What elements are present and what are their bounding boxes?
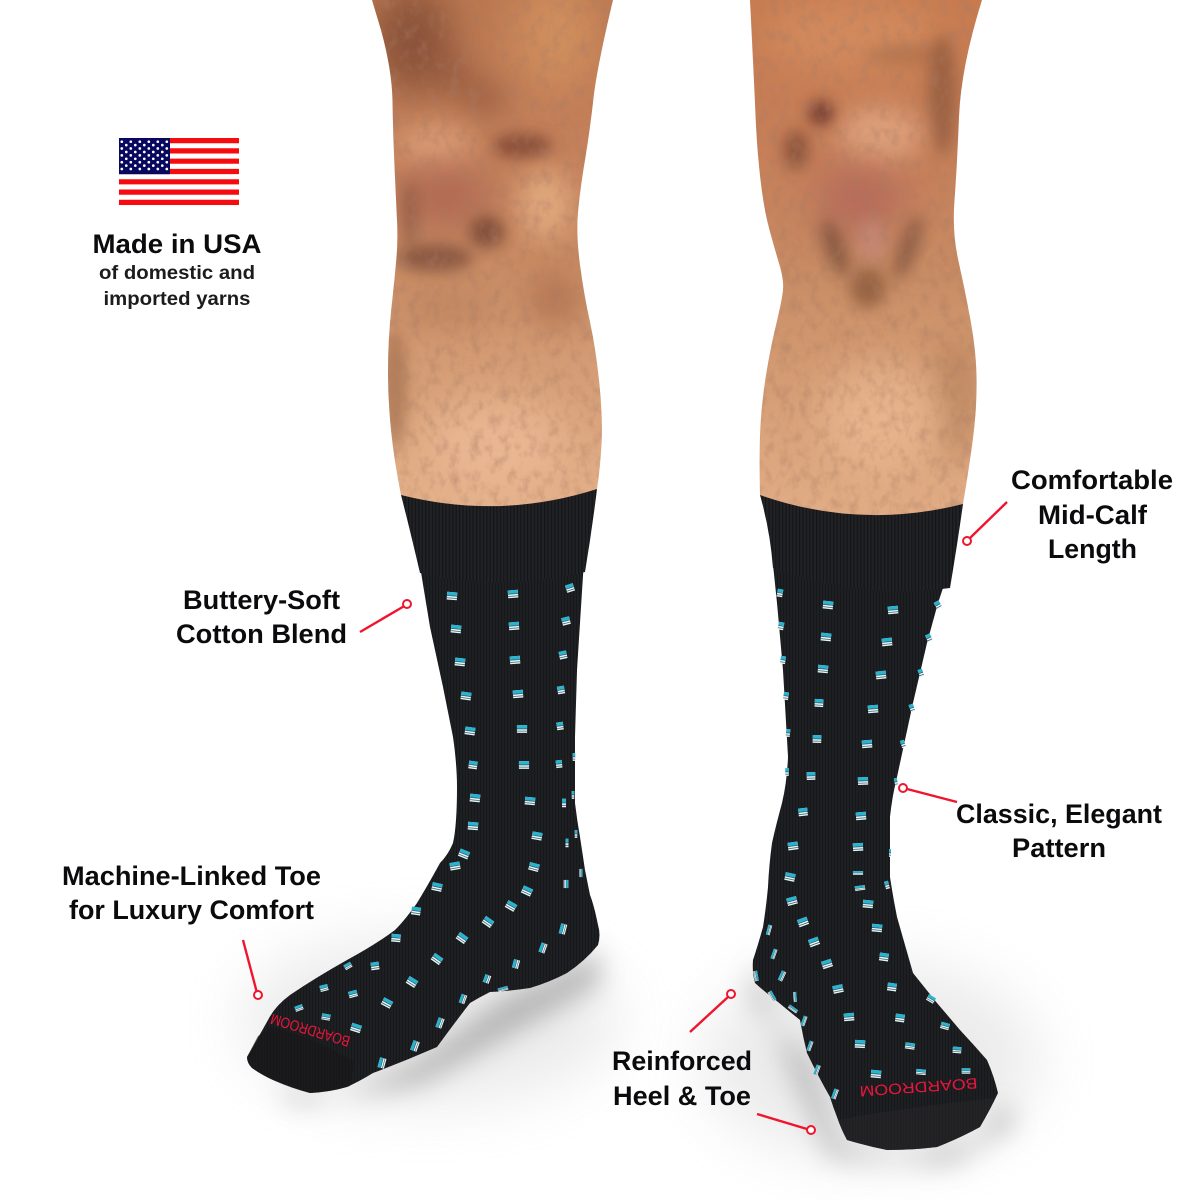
sock body <box>247 560 600 1093</box>
callout: Comfortable Mid-Calf Length: Comfortable <box>1011 465 1173 495</box>
callout: Comfortable Mid-Calf Length: Length <box>1048 534 1137 564</box>
callout: Buttery-Soft Cotton Blend <box>176 585 411 649</box>
callout: Machine-Linked Toe: for Luxury Comfort <box>69 895 314 925</box>
callout: Reinforced Heel and Toe <box>612 990 815 1134</box>
brand: left sock: BOARDROOM <box>269 1010 352 1049</box>
left leg <box>360 0 620 515</box>
callout: Reinforced Heel and Toe: Reinforced <box>612 1046 752 1076</box>
callout: Machine-Linked Toe: Machine-Linked Toe <box>62 861 321 891</box>
brand: right sock: BOARDROOM <box>859 1074 978 1099</box>
callout: Classic, Elegant Pattern: Pattern <box>1012 833 1106 863</box>
callout: Classic, Elegant Pattern: Classic, Elegant <box>956 799 1162 829</box>
cuff <box>760 495 963 591</box>
sock body <box>753 555 998 1150</box>
callout: Comfortable Mid-Calf Length: Mid-Calf <box>1038 500 1148 530</box>
callout: Reinforced Heel and Toe: Heel & Toe <box>613 1081 751 1111</box>
icon: US flag <box>119 138 239 205</box>
right leg <box>745 0 990 525</box>
heading: Made in USA: Made in USA <box>92 229 262 259</box>
floor shadows <box>240 935 1040 1165</box>
skin tone shading: right knee <box>760 0 977 475</box>
heading: Made in USA <box>92 229 262 310</box>
sock pattern: right <box>753 589 970 1100</box>
toe seam <box>247 1027 355 1093</box>
callout: Buttery-Soft Cotton Blend: Cotton Blend <box>176 619 347 649</box>
callout: Comfortable Mid-Calf Length <box>963 465 1173 564</box>
reinforced toe <box>838 1098 995 1150</box>
right sock <box>753 495 998 1150</box>
skin tone shading: left knee <box>370 0 596 490</box>
heading: Made in USA: imported yarns <box>104 289 250 310</box>
callout: Machine-Linked Toe <box>62 861 321 999</box>
cuff <box>401 489 597 582</box>
heading: Made in USA: of domestic and <box>99 263 255 284</box>
callout: Buttery-Soft Cotton Blend: Buttery-Soft <box>183 585 340 615</box>
callout: Classic, Elegant Pattern <box>899 784 1162 863</box>
left sock <box>247 489 600 1093</box>
sock pattern: left <box>294 583 583 1069</box>
